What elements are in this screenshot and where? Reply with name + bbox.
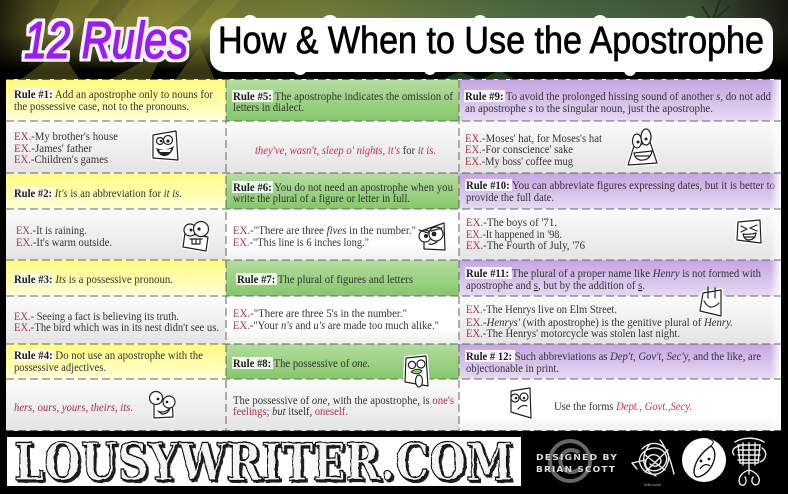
icon: smiling bag face — [700, 287, 721, 316]
rule 7 examples: EX.-"There are three 5's in the number." — [233, 307, 407, 320]
rule 9: Rule #9: To avoid the prolonged hissing sound of another s, do not add — [465, 90, 771, 103]
rule 2: Rule #2: It's is an abbreviation for it is. — [14, 187, 182, 200]
rule 4 examples — [6, 379, 226, 431]
rule 5 examples: they've, wasn't, sleep o' nights, it's for it is. — [255, 144, 436, 157]
rule 8 — [226, 344, 459, 379]
rule 4: possessive adjectives. — [14, 361, 106, 374]
rule 12 examples: Use the forms Dept., Govt.,Secy. — [554, 400, 692, 413]
rule 12 — [459, 344, 781, 379]
rule 5 examples — [226, 121, 459, 173]
icon: squeezed-eyes face — [737, 220, 761, 243]
rule 11 examples: EX.-The Henrys live on Elm Street. — [466, 303, 617, 316]
icon: scribble ball logo — [632, 440, 674, 487]
rule 12: objectionable in print. — [466, 362, 559, 375]
rule 10 examples: EX.-The Fourth of July, '76 — [466, 239, 585, 252]
rule 2 examples — [6, 209, 226, 260]
rule 7: Rule #7: The plural of figures and letters — [237, 273, 413, 286]
rule 11 examples — [459, 296, 781, 344]
rule 9 examples: EX.-Moses' hat, for Moses's hat — [465, 132, 603, 145]
rule 2 examples: EX.-It's warm outside. — [16, 236, 112, 249]
rule 9: an apostrophe s to the singular noun, just the apostrophe. — [465, 102, 713, 115]
rule 6 examples — [226, 209, 459, 260]
rule 3 examples: EX.- Seeing a fact is believing its truth. — [14, 310, 179, 323]
credit: designed by Brian Scott: BRIAN SCOTT — [536, 465, 616, 474]
rule 2 — [6, 173, 226, 209]
rule 11: Rule #11: The plural of a proper name like Henry is not formed with — [466, 267, 761, 280]
rule 11 — [459, 260, 781, 296]
footer logo: LOUSYWRITER.COM: LOUSYWRITER.COM — [14, 433, 513, 493]
rule 10 examples: EX.-It happened in '98. — [466, 228, 562, 241]
title: 12 Rules: 12 Rules — [24, 12, 188, 70]
rule 7 examples — [226, 296, 459, 344]
rule 7 examples: EX.-"Your n's and u's are made too much alike." — [233, 319, 439, 332]
rule 8 examples — [226, 379, 459, 431]
icon: sad mouse in white circle — [682, 437, 726, 482]
rule 11 examples: EX.-Henrys' (with apostrophe) is the genitive plural of Henry. — [466, 316, 733, 329]
rule 7 — [226, 260, 459, 296]
rule 10: provide the full date. — [466, 191, 554, 204]
panel: rules 9 to 12 — [459, 79, 781, 431]
rule 6 examples: EX.-"This line is 6 inches long." — [233, 236, 369, 249]
rule 5: letters in dialect. — [233, 101, 304, 114]
icon: frowning bespectacled face — [511, 388, 531, 418]
icon: squinting face — [419, 223, 445, 250]
rule 9 examples: EX.-My boss' coffee mug — [465, 155, 573, 168]
rule 8 examples: The possessive of one, with the apostrophe, is one's — [233, 394, 454, 407]
credit: designed by Brian Scott: DESIGNED BY — [536, 453, 618, 462]
rule 3: Rule #3: Its is a possessive pronoun. — [14, 273, 173, 286]
rule 5: Rule #5: The apostrophe indicates the omission of — [233, 90, 453, 103]
rule 12: Rule # 12: Such abbreviations as Dep't, Gov't, Sec'y, and the like, are — [466, 350, 761, 363]
rule 10 — [459, 173, 781, 209]
rule 1 examples — [6, 121, 226, 173]
rule 9 examples: EX.-For conscience' sake — [465, 143, 573, 156]
rule 9 examples — [459, 121, 781, 173]
panel: rules 5 to 8 — [226, 79, 459, 431]
rule 1 examples: EX.-My brother's house — [14, 130, 118, 143]
rule 11 examples: EX.-The Henrys' motorcycle was stolen last night. — [466, 327, 680, 340]
rule 8: Rule #8: The possessive of one. — [233, 357, 370, 370]
icon: laughing bag face — [628, 129, 657, 165]
rule 12 examples — [459, 379, 781, 431]
rule 4: Rule #4: Do not use an apostrophe with the — [14, 349, 203, 362]
rule 6: write the plural of a figure or letter in full. — [233, 192, 410, 205]
rule 4 — [6, 344, 226, 379]
rule 6 examples: EX.-"There are three fives in the number." — [233, 224, 416, 237]
title: How and When to Use the Apostrophe — [210, 15, 773, 76]
icon: buck-toothed face — [183, 222, 208, 251]
rule 10 examples — [459, 209, 781, 260]
rule 1 examples: EX.-James' father — [14, 142, 92, 155]
rule 3 examples: EX.-The bird which was in its nest didn't see us. — [14, 321, 219, 334]
rule 10 examples: EX.-The boys of '71. — [466, 216, 557, 229]
rule 4 examples: hers, ours, yours, theirs, its. — [14, 401, 133, 414]
panel: rules 1 to 4 — [6, 79, 226, 431]
rule 11: apostrophe and s, but by the addition of s. — [466, 279, 645, 292]
rule 1 — [6, 80, 226, 121]
icon: tall tilted face — [405, 356, 428, 387]
rule 1: the possessive case, not to the pronouns. — [14, 100, 189, 113]
rule 9 — [459, 80, 781, 121]
rule 3 examples — [6, 296, 226, 344]
rule 3 — [6, 260, 226, 296]
rule 1 examples: EX.-Children's games — [14, 153, 108, 166]
rule 1: Rule #1: Add an apostrophe only to nouns for — [14, 88, 213, 101]
rule 6 — [226, 173, 459, 209]
icon: scribble ball logo: hello world — [644, 483, 661, 487]
credit: designed by Brian Scott — [536, 441, 618, 481]
rule 6: Rule #6: You do not need an apostrophe when you — [233, 181, 453, 194]
rule 10: Rule #10: You can abbreviate figures expressing dates, but it is better to — [466, 179, 775, 192]
icon: grinning face — [153, 131, 178, 160]
icon: scribbled robot — [733, 438, 766, 485]
rule 5 — [226, 80, 459, 121]
icon: bespectacled face — [150, 392, 175, 418]
rule 8 examples: feelings; but itself, oneself. — [233, 405, 348, 418]
rule 2 examples: EX.-It is raining. — [16, 224, 87, 237]
